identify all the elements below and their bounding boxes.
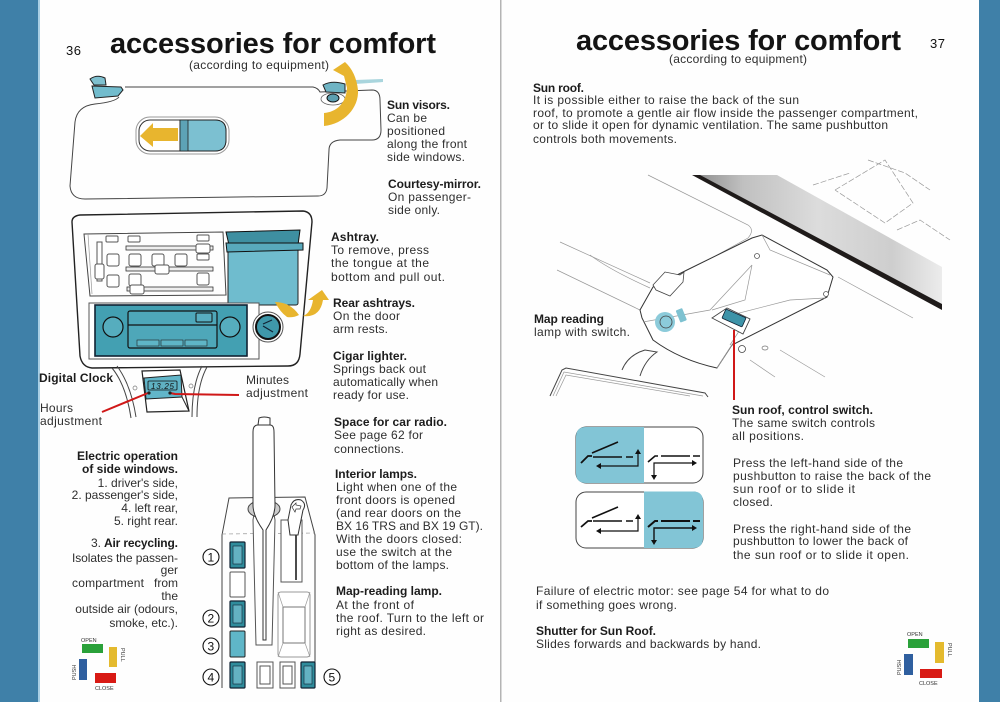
- text: courtesy mirror: On passenger-: [388, 190, 471, 204]
- text: air recycling: [72, 536, 178, 630]
- circled numbers: 1: [208, 550, 214, 564]
- text: sun roof: roof, to promote a gentle air flow inside the passenger compartment,: [533, 106, 918, 120]
- text: map-reading lamp: right as desired.: [336, 624, 426, 638]
- left blue page edge: [0, 0, 38, 702]
- text: electric operation of side windows: [72, 449, 178, 528]
- text: sun visors: positioned: [387, 124, 445, 138]
- text: air recycling: from: [154, 576, 178, 590]
- circled numbers: 5: [328, 670, 336, 684]
- title: left page: accessories for comfort: [110, 28, 436, 60]
- text: air recycling: outside air (odours,: [75, 602, 178, 616]
- switch 1: [230, 542, 245, 568]
- page number 36: 36: [66, 43, 81, 58]
- red leader: switch: [733, 330, 735, 400]
- text: air recycling: Isolates the passen-: [72, 551, 178, 565]
- text: air recycling: 3.: [91, 536, 101, 550]
- text: shutter for sun roof: Slides forwards and backwards by hand.: [536, 637, 761, 651]
- overhead console: [640, 235, 833, 368]
- headlining lines: [557, 160, 950, 377]
- handbrake lever: [281, 500, 305, 582]
- text: electric operation of side windows: of side windows.: [82, 462, 178, 476]
- text: press left-hand side: sun roof or to slide it: [733, 482, 856, 496]
- text: map-reading lamp: At the front of: [336, 598, 415, 612]
- label: hours adjustment: adjustment: [40, 414, 103, 428]
- icon: vanity mirror with slide arrow: [136, 117, 229, 154]
- text: ashtray: bottom and pull out.: [331, 270, 445, 284]
- text: ashtray: Ashtray.: [331, 230, 379, 244]
- text: space for car radio: [334, 415, 447, 456]
- text: shutter for sun roof: Shutter for Sun Roof.: [536, 624, 656, 638]
- text: sun roof: It is possible either to raise the back of the sun: [533, 93, 799, 107]
- arrow: curved visor rotation: [324, 62, 358, 126]
- legend: right page direction key: [897, 632, 952, 687]
- digital clock: [112, 366, 207, 418]
- label: minutes adjustment: Minutes: [246, 373, 289, 387]
- text: press right-hand side: [733, 522, 911, 562]
- title: right page: accessories for comfort: [576, 25, 901, 57]
- blank switches: [257, 662, 295, 688]
- label: map reading: [534, 312, 630, 339]
- text: sun visors: along the front: [387, 137, 468, 151]
- legend: left page direction key: PUSH: [72, 665, 78, 680]
- switch 5: [301, 662, 315, 688]
- text: rear ashtrays: On the door: [333, 309, 400, 323]
- text: failure of electric motor: Failure of electric motor: see page 54 for what to do: [536, 584, 829, 598]
- text: interior lamps: bottom of the lamps.: [336, 558, 449, 572]
- text: ashtray: [331, 230, 445, 284]
- switch 2: [230, 601, 245, 627]
- text: sun roof control switch: [732, 403, 875, 443]
- text: sun roof control switch: Sun roof, control switch.: [732, 403, 873, 417]
- text: electric operation of side windows: 2. passenger's side,: [72, 488, 178, 502]
- text: failure of electric motor: if something goes wrong.: [536, 598, 677, 612]
- text: air recycling: ger: [161, 563, 178, 577]
- label: map reading: Map reading: [534, 312, 604, 326]
- storage tray: [278, 592, 310, 657]
- icon: raise symbol: [581, 442, 641, 469]
- text: air recycling: the: [161, 589, 178, 603]
- label: minutes adjustment: [246, 373, 309, 400]
- icon: lower symbol: [648, 456, 700, 480]
- text: rear ashtrays: [333, 296, 415, 336]
- legend: left page direction key: CLOSE: [95, 686, 114, 692]
- sun roof control switch: [712, 308, 750, 334]
- subtitle: right page: (according to equipment): [669, 52, 807, 66]
- radio panel: [89, 303, 259, 359]
- text: sun visors: Sun visors.: [387, 98, 450, 112]
- text: press left-hand side: Press the left-hand side of the: [733, 456, 903, 470]
- text: ashtray: To remove, press: [331, 243, 429, 257]
- illustration: dashboard console: [72, 211, 329, 418]
- label: digital clock: Digital Clock: [39, 371, 113, 385]
- text: cigar lighter: [333, 349, 438, 402]
- switch 3: [230, 631, 245, 657]
- ashtray: [226, 230, 303, 305]
- text: electric operation of side windows: 4. left rear,: [121, 501, 178, 515]
- arrow: ashtray removal: [275, 290, 329, 317]
- text: ashtray: the tongue at the: [331, 256, 429, 270]
- text: space for car radio: See page 62 for: [334, 428, 423, 442]
- text: space for car radio: Space for car radio.: [334, 415, 447, 429]
- legend: left page direction key: PULL: [119, 648, 125, 662]
- text: interior lamps: [335, 467, 483, 572]
- diagram: pushbutton left side pressed: [576, 427, 703, 483]
- text: space for car radio: connections.: [334, 442, 404, 456]
- text: sun roof control switch: all positions.: [732, 429, 804, 443]
- text: rear ashtrays: arm rests.: [333, 322, 388, 336]
- icon: right visor clip: [321, 79, 383, 105]
- icon: lower symbol: [648, 521, 700, 545]
- right blue page edge: [979, 0, 1000, 702]
- legend: right page direction key: OPEN: [907, 632, 923, 638]
- text: sun visors: Can be: [387, 111, 427, 125]
- illustration: sun visor: [70, 62, 383, 199]
- red leader lines: [102, 391, 239, 412]
- text: sun visors: [387, 98, 468, 164]
- legend: right page direction key: CLOSE: [919, 681, 938, 687]
- digital clock: 13.25: [151, 382, 175, 391]
- text: press left-hand side: pushbutton to raise the back of the: [733, 469, 931, 483]
- text: electric operation of side windows: 5. right rear.: [114, 514, 178, 528]
- text: sun roof: controls both movements.: [533, 132, 677, 146]
- text: interior lamps: With the doors closed:: [336, 532, 462, 546]
- page number 37: 37: [930, 36, 945, 51]
- text: failure of electric motor: [536, 584, 829, 612]
- text: sun roof: [533, 81, 918, 146]
- text: rear ashtrays: Rear ashtrays.: [333, 296, 415, 310]
- text: press right-hand side: the sun roof or to slide it open.: [733, 548, 909, 562]
- legend: left page direction key: [72, 638, 125, 692]
- text: map-reading lamp: the roof. Turn to the left or: [336, 611, 484, 625]
- text: courtesy mirror: [388, 177, 481, 217]
- text: courtesy mirror: Courtesy-mirror.: [388, 177, 481, 191]
- illustration: sun roof interior: [550, 160, 950, 400]
- label: hours adjustment: Hours: [40, 401, 73, 415]
- text: cigar lighter: Cigar lighter.: [333, 349, 407, 363]
- text: sun visors: side windows.: [387, 150, 465, 164]
- circled numbers: 3: [208, 640, 214, 654]
- text: cigar lighter: ready for use.: [333, 388, 409, 402]
- legend: right page direction key: PUSH: [897, 660, 903, 675]
- map reading lamp and switch: [655, 308, 687, 332]
- text: sun roof: or to slide it open for dynamic ventilation. The same pushbutton: [533, 118, 888, 132]
- cigar lighter: [253, 312, 283, 342]
- text: interior lamps: Light when one of the: [336, 480, 457, 494]
- heater controls panel: [84, 232, 226, 296]
- text: electric operation of side windows: Electric operation: [77, 449, 178, 463]
- rear view mirror: [550, 350, 708, 397]
- diagram: pushbutton right side pressed: [576, 492, 703, 548]
- sun roof panel edge: [692, 175, 942, 310]
- circled numbers: 2: [208, 612, 214, 626]
- illustration: centre console switches: [203, 417, 340, 688]
- text: map-reading lamp: Map-reading lamp.: [336, 584, 442, 598]
- icon: left visor clip: [90, 76, 123, 98]
- text: interior lamps: BX 16 TRS and BX 19 GT).: [336, 519, 483, 533]
- text: press right-hand side: pushbutton to lower the back of: [733, 534, 909, 548]
- text: air recycling: Air recycling.: [104, 536, 178, 550]
- text: interior lamps: use the switch at the: [336, 545, 452, 559]
- gear lever: [248, 417, 280, 645]
- legend: right page direction key: PULL: [946, 643, 952, 657]
- legend: left page direction key: OPEN: [81, 638, 97, 644]
- label: minutes adjustment: adjustment: [246, 386, 309, 400]
- switch 4: [230, 662, 245, 688]
- blank switch position: [230, 572, 245, 597]
- text: shutter for sun roof: [536, 624, 761, 651]
- text: press left-hand side: closed.: [733, 495, 773, 509]
- circled numbers: 4: [208, 670, 214, 684]
- icon: raise symbol: [581, 507, 641, 534]
- label: map reading: lamp with switch.: [534, 325, 630, 339]
- text: cigar lighter: automatically when: [333, 375, 438, 389]
- text: air recycling: compartment: [72, 576, 145, 590]
- text: sun roof control switch: The same switch controls: [732, 416, 875, 430]
- text: electric operation of side windows: 1. driver's side,: [98, 476, 178, 490]
- text: press left-hand side: [733, 456, 931, 509]
- label: hours adjustment: [40, 401, 103, 428]
- text: air recycling: smoke, etc.).: [109, 616, 178, 630]
- text: cigar lighter: Springs back out: [333, 362, 427, 376]
- text: interior lamps: (and rear doors on the: [336, 506, 461, 520]
- text: sun roof: Sun roof.: [533, 81, 584, 95]
- text: interior lamps: front doors is opened: [336, 493, 455, 507]
- text: interior lamps: Interior lamps.: [335, 467, 417, 481]
- text: courtesy mirror: side only.: [388, 203, 440, 217]
- text: press right-hand side: Press the right-hand side of the: [733, 522, 911, 536]
- circled numbers: [203, 549, 340, 685]
- subtitle: left page: (according to equipment): [189, 58, 329, 72]
- text: map-reading lamp: [336, 584, 484, 638]
